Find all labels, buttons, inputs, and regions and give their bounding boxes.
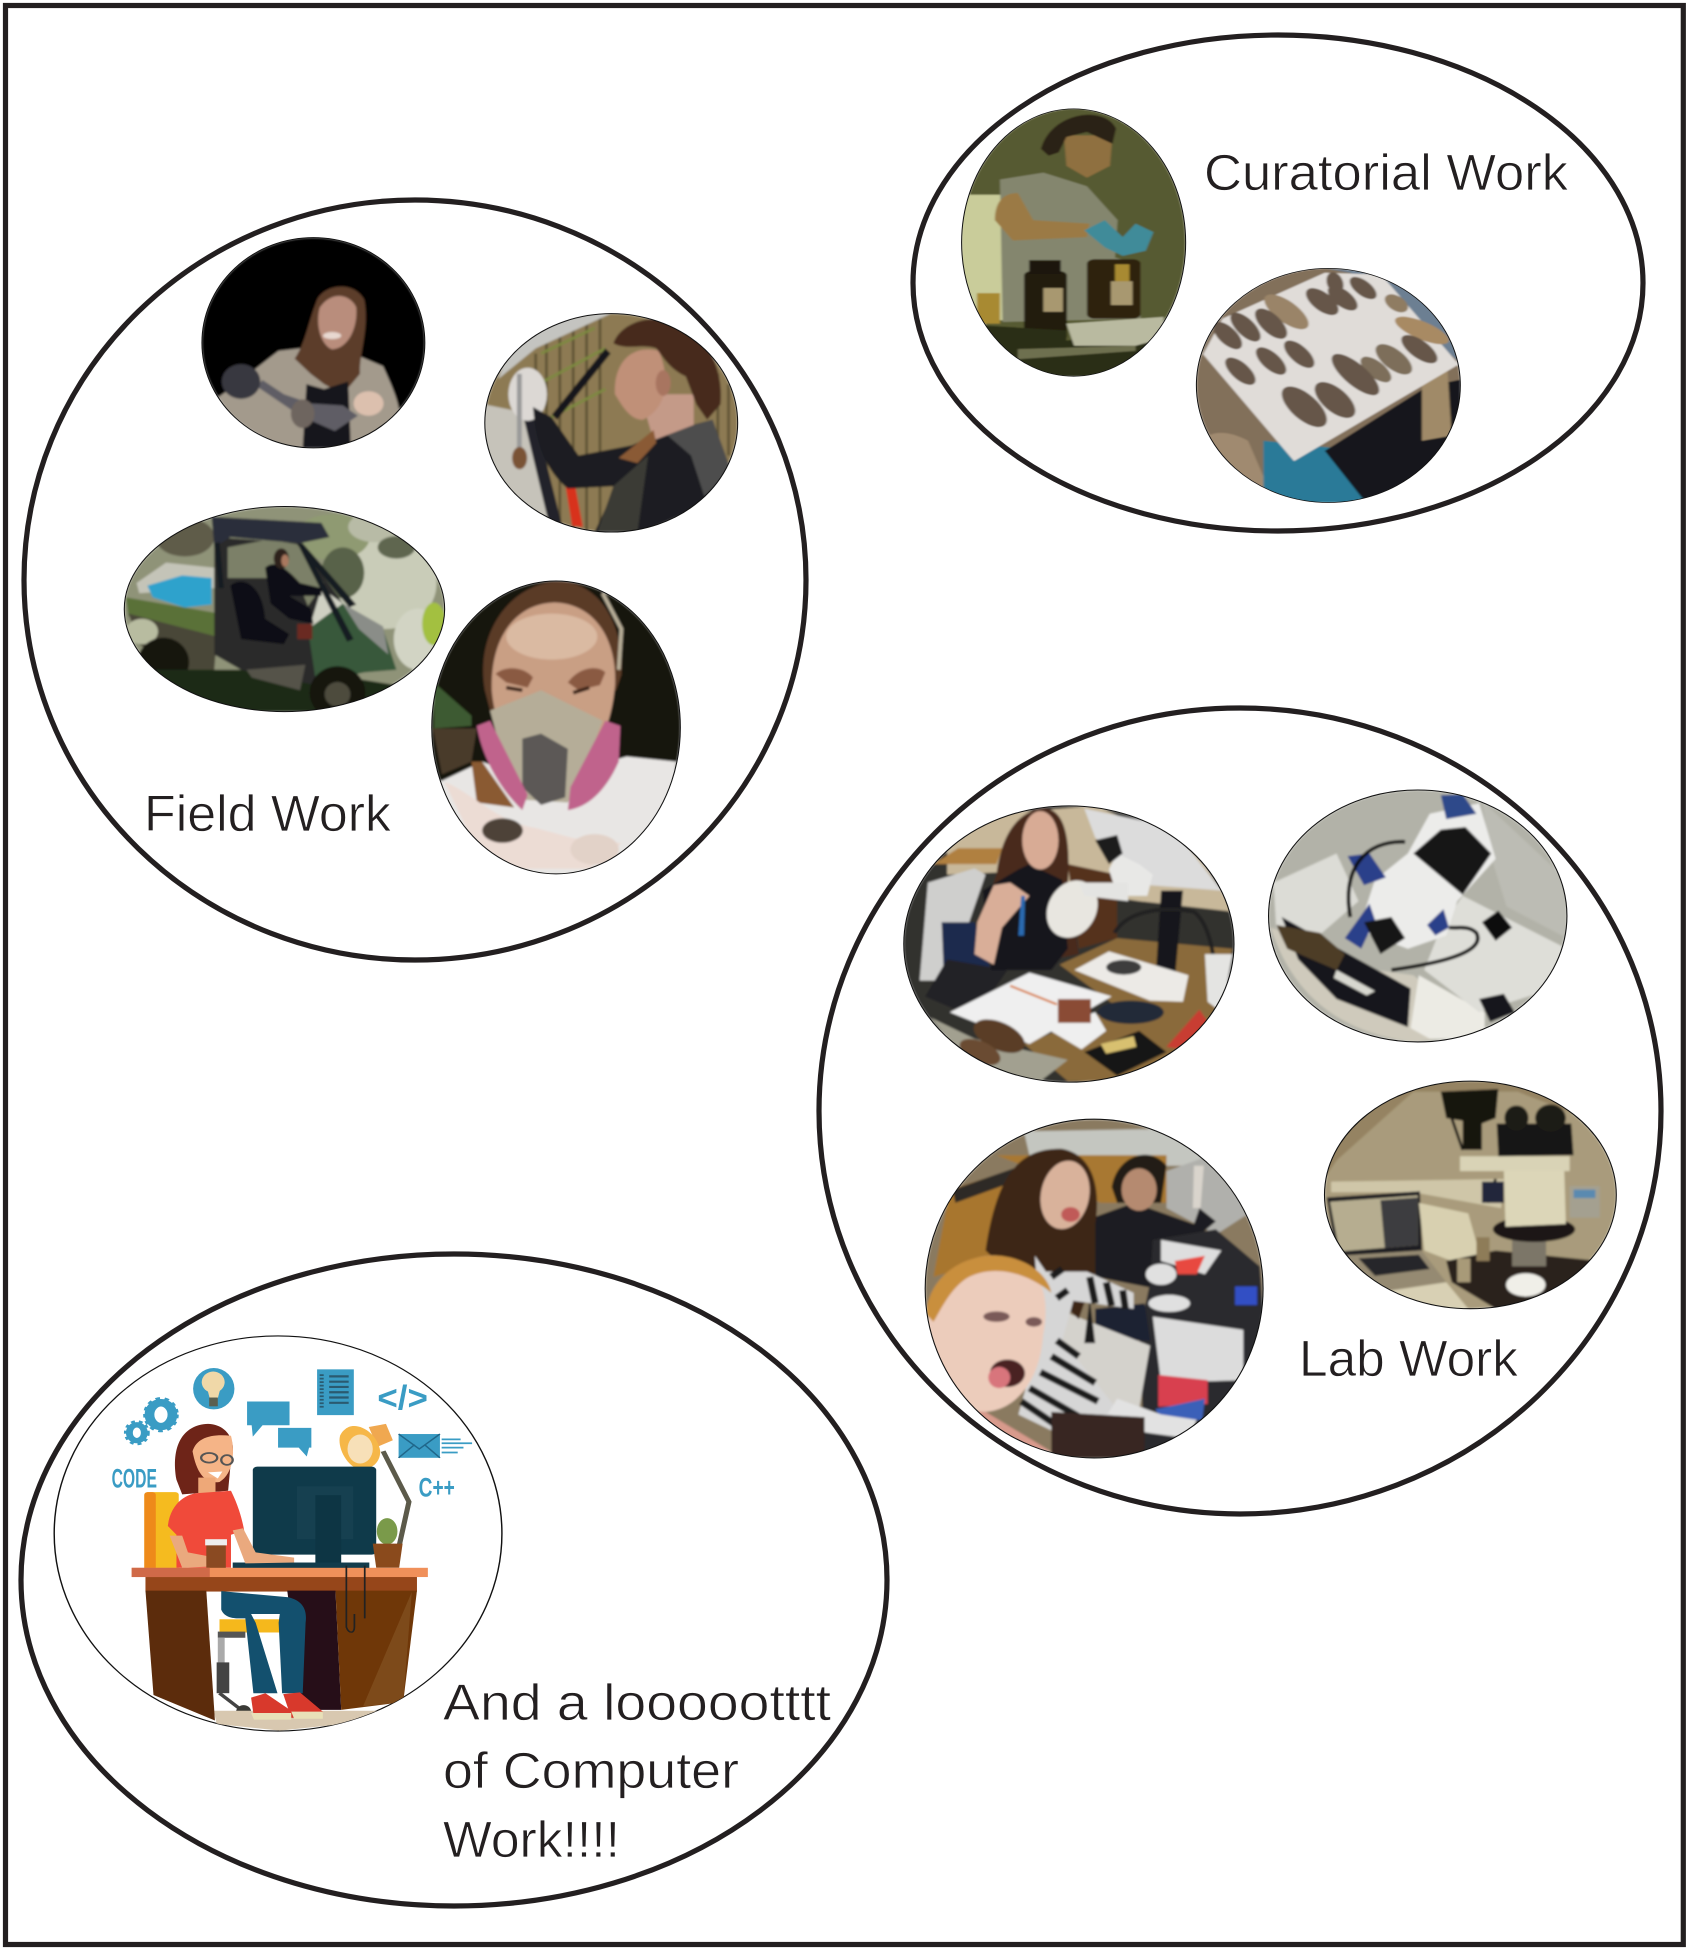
photo: woman in respirator mask holding a small mammal: [432, 581, 680, 874]
lab work outline: [819, 708, 1661, 1514]
photo: microscope with camera and laptop: [1324, 1081, 1616, 1309]
label: Lab Work: Lab Work: [1299, 1330, 1518, 1387]
label: Curatorial Work: Curatorial Work: [1204, 144, 1569, 201]
icon: gears: [125, 1398, 177, 1444]
label: And a looooottttt of Computer Work!!!!: Work!!!!: [443, 1811, 620, 1868]
photo: Zeiss microscope from above: [1269, 790, 1567, 1042]
monitor and keyboard: [233, 1467, 376, 1569]
woman: [168, 1424, 294, 1568]
floor shadow: [214, 1711, 377, 1731]
illustration: woman coding at a desk: CODE: [112, 1463, 157, 1494]
label: And a looooottttt of Computer Work!!!!: And a looooo​tttt: [443, 1674, 831, 1731]
legs and sneakers: [221, 1591, 323, 1720]
chair: [144, 1492, 284, 1718]
photo: three women making faces in the lab: [925, 1119, 1263, 1458]
photo: woman at a desk with a stereo microscope: [904, 806, 1234, 1082]
icon: C++ label: C++: [419, 1472, 455, 1503]
panel: computer work: [21, 1254, 887, 1906]
cables: [346, 1566, 365, 1632]
icon: speech bubbles: [247, 1401, 311, 1456]
icon: envelope: [399, 1434, 472, 1458]
illustration: woman coding at a desk: [54, 1336, 502, 1731]
photo: board of pinned rodent specimens: [1196, 268, 1460, 502]
label: Field Work: Field Work: [144, 785, 392, 842]
icon: document: [317, 1369, 354, 1415]
icon: light bulb: [193, 1368, 234, 1409]
desk: [132, 1568, 428, 1720]
photo: woman weighing a rodent by a vehicle: [485, 314, 738, 532]
computer work outline: [21, 1254, 887, 1906]
panel: lab work: [819, 708, 1661, 1514]
photo: woman driving a utility vehicle in the forest: [124, 507, 446, 719]
photo: woman handling specimen jars: [962, 109, 1186, 376]
photo: woman holding a bat at night: [202, 238, 425, 448]
icon: desk lamp: [339, 1424, 409, 1546]
curatorial work outline: [913, 35, 1643, 531]
panel: field work: [24, 200, 806, 960]
field work outline: [24, 200, 806, 960]
icon: code brackets: </>: [377, 1379, 428, 1417]
panel: curatorial work: [913, 35, 1643, 531]
potted cactus: [373, 1518, 403, 1568]
label: And a looooottttt of Computer Work!!!!: of Computer: [443, 1742, 739, 1799]
